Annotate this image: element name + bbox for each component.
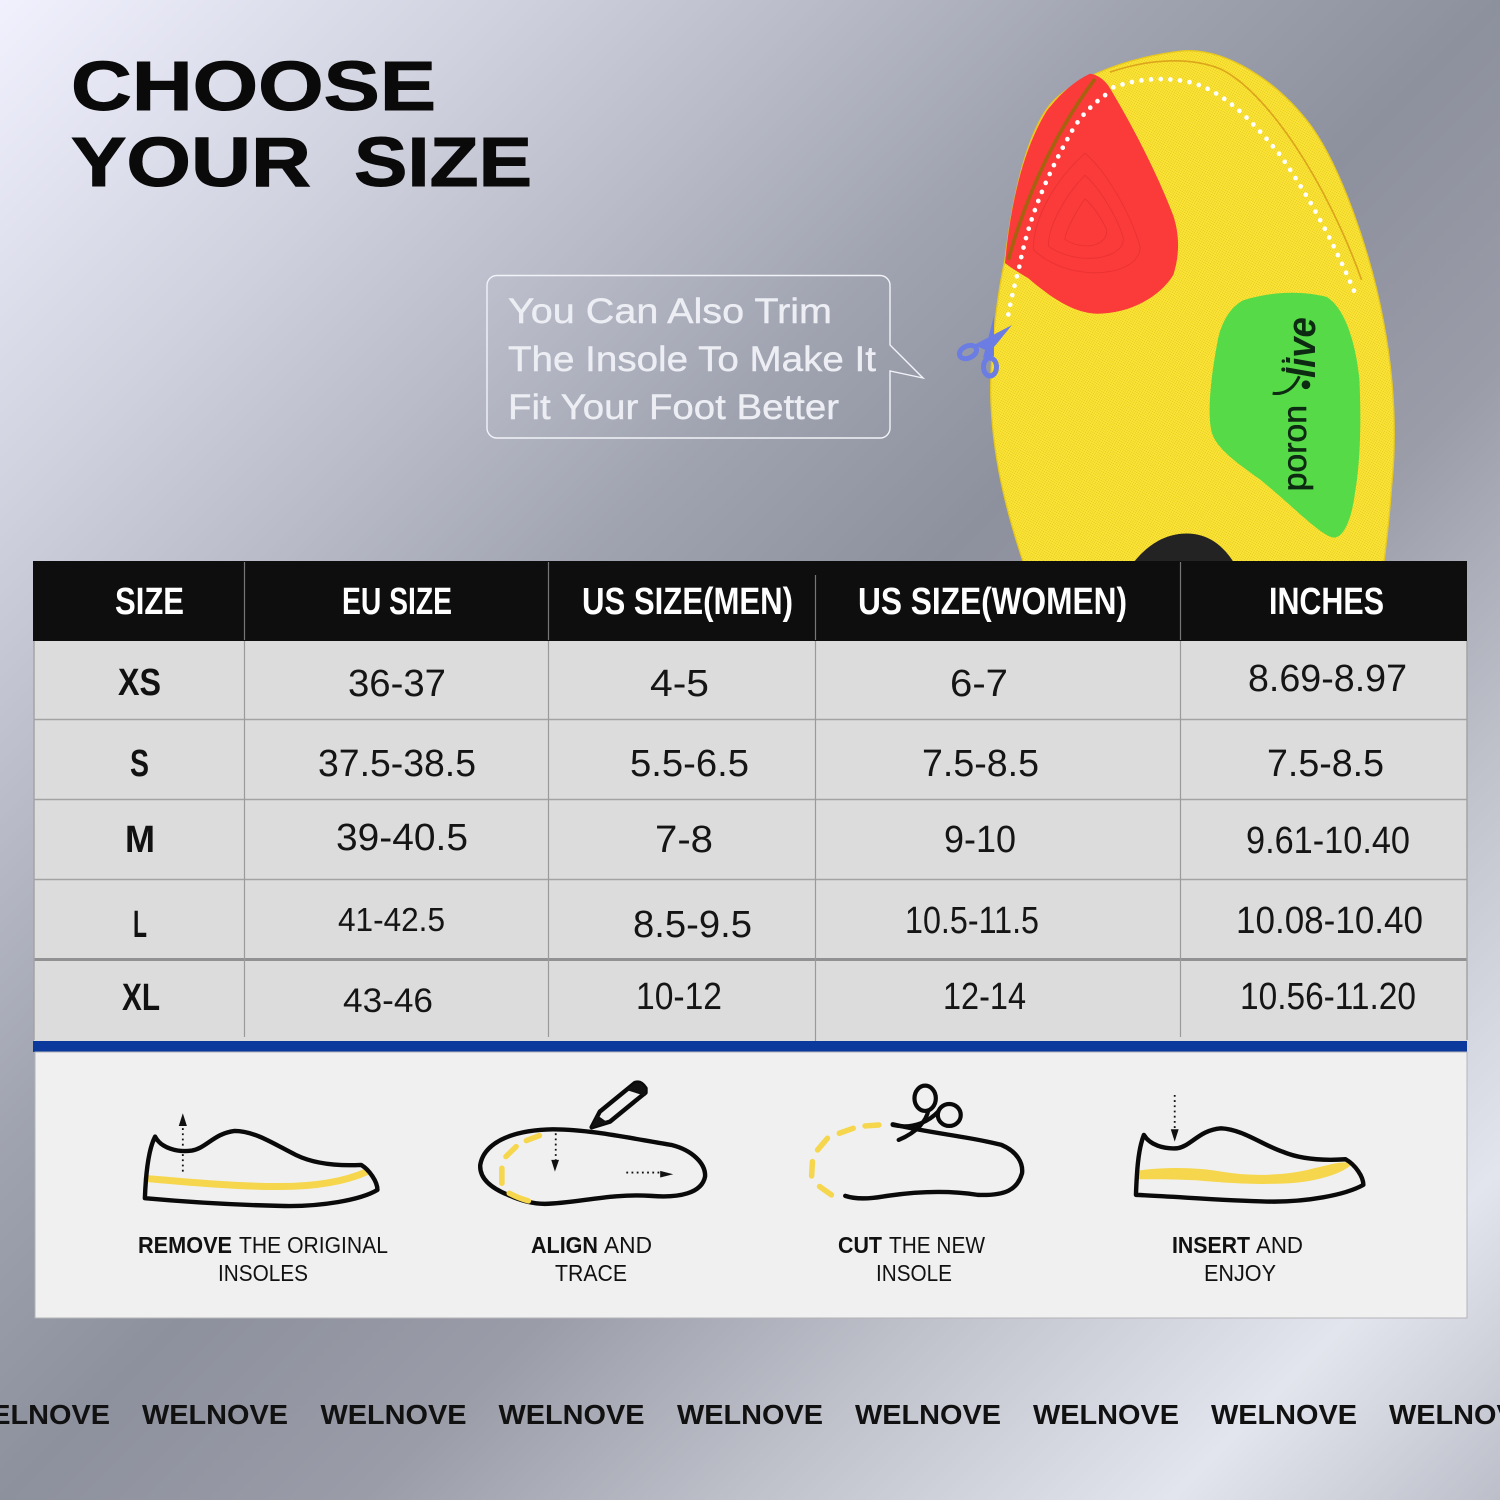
insole illustration — [991, 51, 1394, 567]
row XL: 12-14 — [943, 976, 1026, 1018]
row XL: 10-12 — [636, 976, 722, 1018]
row S: S — [130, 743, 149, 785]
title — [71, 47, 532, 201]
row XS: 4-5 — [650, 663, 709, 705]
row L: 10.5-11.5 — [905, 900, 1039, 942]
row M: 9-10 — [944, 819, 1016, 861]
step 3: cut: CUT — [838, 1232, 882, 1258]
table header: SIZE — [115, 581, 184, 623]
step 4: insert: ENJOY — [1204, 1260, 1276, 1286]
table header: INCHES — [1269, 581, 1384, 623]
table header: US SIZE(MEN) — [582, 581, 793, 623]
red forefoot pad — [1005, 74, 1178, 314]
logo: poron live: poron — [1277, 405, 1314, 491]
insole body — [991, 51, 1394, 567]
step 3: cut: THE NEW — [889, 1232, 985, 1258]
stitched rim — [1110, 61, 1362, 280]
row XS: XS — [118, 662, 161, 704]
logo: poron live: live — [1279, 317, 1324, 378]
step 1: remove — [138, 1113, 388, 1286]
brand strip: WELNOVE — [855, 1399, 1001, 1430]
logo: poron live — [1277, 317, 1324, 491]
callout: trim the insole: The Insole To Make It — [508, 340, 876, 379]
green heel pad — [1210, 293, 1360, 538]
icon: blue scissors — [957, 316, 1012, 376]
callout: trim the insole: You Can Also Trim — [508, 292, 832, 331]
table header: US SIZE(WOMEN) — [858, 581, 1127, 623]
brand strip: WELNOVE — [1033, 1399, 1179, 1430]
step 3: cut: INSOLE — [876, 1260, 952, 1286]
callout: trim the insole — [487, 276, 923, 438]
size table — [33, 561, 1467, 1048]
step 1: remove: REMOVE — [138, 1232, 232, 1258]
row XL: 10.56-11.20 — [1240, 976, 1416, 1018]
row L: L — [133, 904, 147, 946]
table header — [33, 561, 1467, 641]
row XS: 6-7 — [950, 663, 1008, 705]
row XS — [118, 658, 1407, 705]
step 4: insert: AND — [1256, 1232, 1303, 1258]
icon: pencil — [592, 1083, 645, 1127]
row S: 7.5-8.5 — [922, 743, 1039, 785]
step 4: insert — [1136, 1095, 1363, 1286]
title: YOUR — [71, 123, 311, 201]
title: SIZE — [354, 123, 532, 201]
brand strip: WELNOVE — [1211, 1399, 1357, 1430]
row L — [133, 900, 1423, 946]
callout: trim the insole: Fit Your Foot Better — [508, 388, 839, 427]
dotted trim line — [1008, 94, 1107, 314]
row XL — [122, 976, 1416, 1020]
brand strip: WELNOVE — [142, 1399, 288, 1430]
row M: 9.61-10.40 — [1246, 820, 1410, 862]
row M — [125, 817, 1410, 862]
step 4: insert: INSERT — [1172, 1232, 1250, 1258]
step 1: remove: INSOLES — [218, 1260, 308, 1286]
row S — [130, 743, 1384, 785]
row L: 41-42.5 — [338, 901, 445, 938]
brand strip: WELNOVE — [498, 1399, 644, 1430]
step 3: cut — [812, 1086, 1022, 1286]
row XL: 43-46 — [343, 982, 433, 1020]
row XL: XL — [122, 977, 160, 1019]
step 2: align: TRACE — [555, 1260, 627, 1286]
step 1: remove: THE ORIGINAL — [239, 1232, 388, 1258]
heel cup — [1130, 533, 1237, 567]
row S: 7.5-8.5 — [1267, 743, 1384, 785]
row L: 10.08-10.40 — [1236, 900, 1423, 942]
panel: insole fitting steps — [35, 1052, 1467, 1318]
row L: 8.5-9.5 — [633, 904, 752, 946]
brand strip: WELNOVE — [677, 1399, 823, 1430]
blue divider bar — [33, 1041, 1467, 1052]
row M: 39-40.5 — [336, 817, 468, 859]
brand strip — [0, 1399, 1500, 1430]
icon: scissors — [893, 1086, 961, 1140]
brand strip: WELNOVE — [320, 1399, 466, 1430]
table header: EU SIZE — [342, 581, 452, 623]
row XS: 36-37 — [348, 663, 446, 705]
row M: 7-8 — [655, 819, 713, 861]
row XS: 8.69-8.97 — [1248, 658, 1407, 700]
step 2: align: ALIGN — [531, 1232, 598, 1258]
title: CHOOSE — [71, 47, 436, 125]
row S: 5.5-6.5 — [630, 743, 749, 785]
row M: M — [125, 819, 155, 861]
row S: 37.5-38.5 — [318, 743, 476, 785]
step 2: align: AND — [604, 1232, 652, 1258]
step 2: align — [480, 1083, 705, 1286]
